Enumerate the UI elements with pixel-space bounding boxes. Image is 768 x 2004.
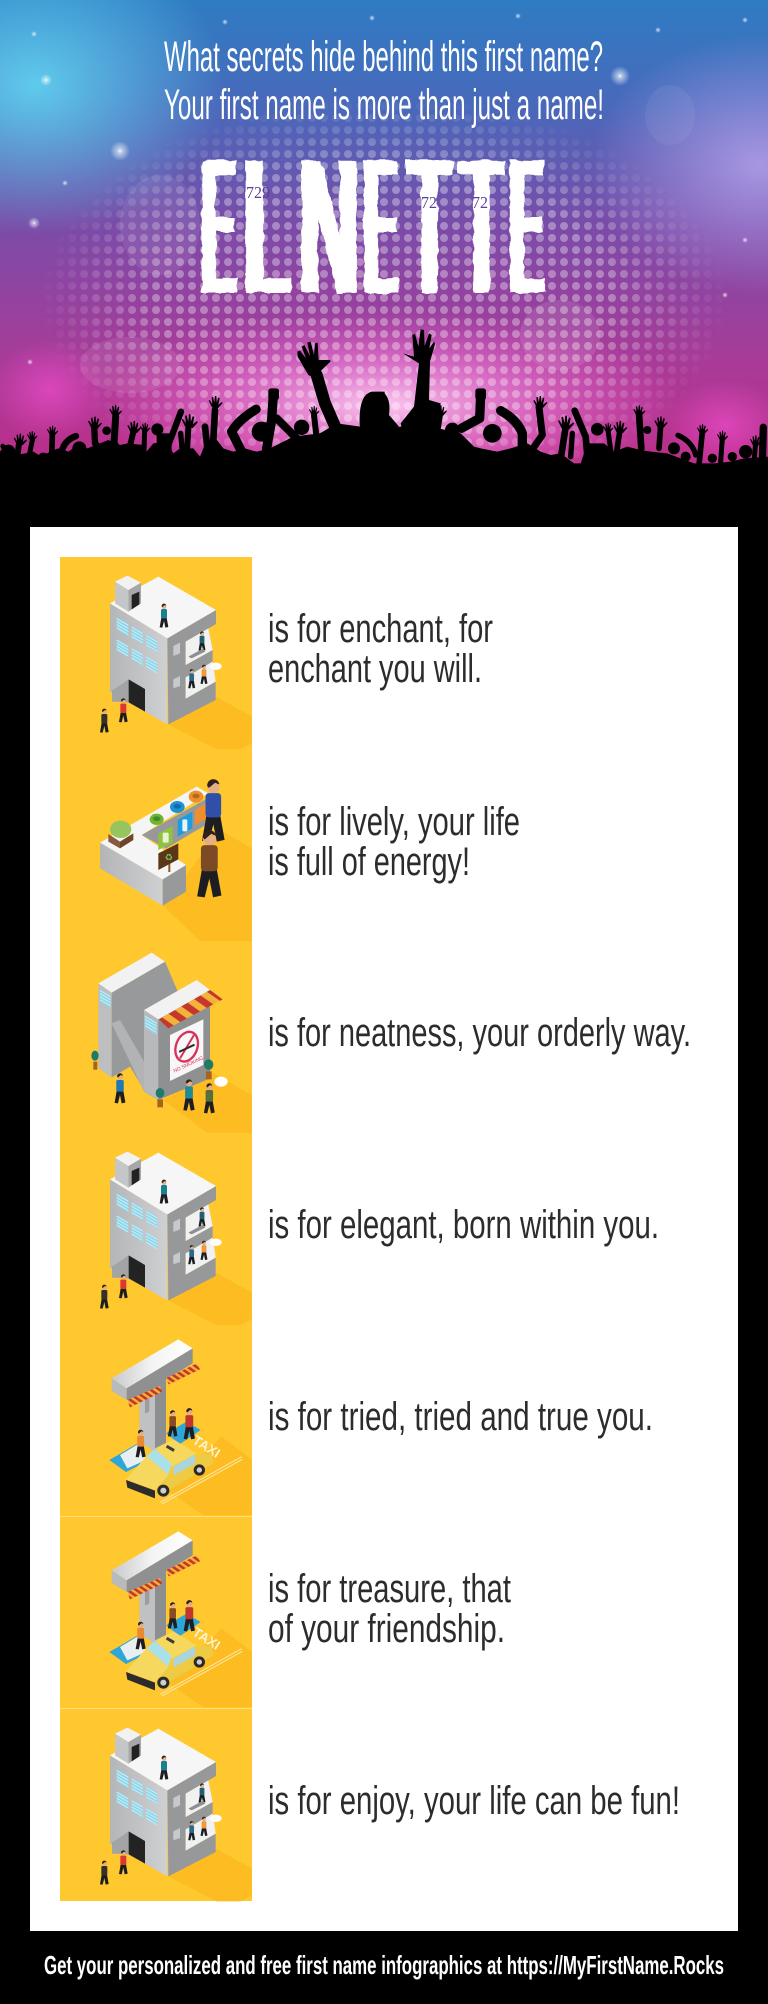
white content panel [30,527,738,1931]
yellow illustration column [60,557,252,1901]
text: enchant: is for enchant, for [268,607,493,651]
black band under crowd [0,472,768,532]
name title: 72 [472,193,488,212]
name title: T [409,118,450,334]
icon: taxi stand letter T [109,1339,252,1515]
text: lively: is full of energy! [268,840,470,884]
crowd silhouette: right half [383,329,768,502]
header: concert background [0,0,768,500]
text: enchant: enchant you will. [268,647,482,691]
name title: T [461,118,502,334]
name title: 72 [421,193,437,212]
name title: N [300,118,358,334]
name title: 729 [246,183,270,202]
icon: shop letter N: NO SMOKING [173,1055,205,1074]
icon: recycling station letter L: ♻ [165,853,173,864]
name title: E [203,118,234,334]
icon: building letter E [100,1728,252,1901]
icon: recycling station letter L [100,779,252,941]
row 5: T for tried [109,1339,653,1515]
icon: building letter E [100,1152,252,1325]
row 2: L for lively [100,779,520,941]
icon: building letter E [100,576,252,749]
text: treasure: is for treasure, that [268,1567,511,1611]
name title: E [365,118,396,334]
row 1: E for enchant [100,576,493,749]
name title [203,118,542,334]
row 3: N for neatness [91,953,691,1133]
icon: taxi stand letter T [109,1531,252,1707]
crowd silhouette: left half [0,342,385,502]
text: lively: is for lively, your life [268,800,520,844]
text: E [511,118,542,334]
row 6: T for treasure [109,1531,511,1707]
row 7: E for enjoy [100,1728,680,1901]
row 4: E for elegant [100,1152,659,1325]
text: treasure: of your friendship. [268,1607,505,1651]
icon: shop letter N [91,953,252,1133]
name title: L [244,118,289,334]
